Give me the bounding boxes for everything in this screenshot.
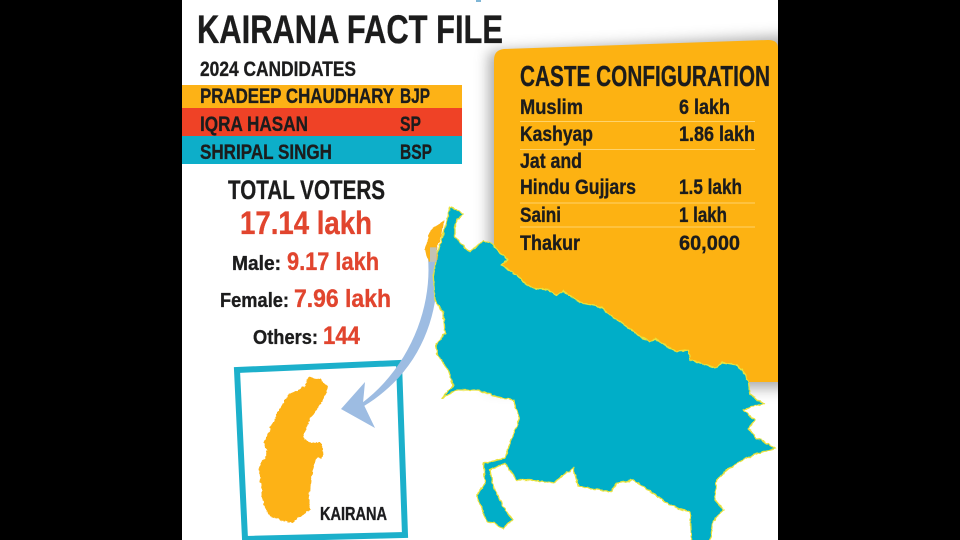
other voters: Others: bbox=[253, 327, 318, 349]
candidate: Iqra Hasan: IQRA HASAN bbox=[200, 113, 308, 136]
arrow: map to inset bbox=[341, 258, 437, 428]
voters heading: TOTAL VOTERS bbox=[228, 175, 385, 205]
caste table: Thakur bbox=[520, 232, 580, 255]
caste table: 6 lakh bbox=[679, 96, 730, 119]
female voters: 7.96 lakh bbox=[294, 285, 391, 313]
female voters bbox=[220, 285, 391, 313]
other voters: 144 bbox=[323, 322, 360, 350]
panel: caste configuration bbox=[489, 36, 790, 388]
caste table: Jat and bbox=[520, 150, 582, 173]
caste table bbox=[520, 96, 755, 255]
white page background bbox=[182, 0, 778, 540]
caste table: 60,000 bbox=[679, 232, 740, 255]
inset label: KAIRANA bbox=[320, 504, 387, 524]
candidate: Iqra Hasan: SP bbox=[400, 113, 421, 136]
caste table: Hindu Gujjars bbox=[520, 176, 636, 199]
candidate: Shripal Singh: SHRIPAL SINGH bbox=[200, 141, 332, 164]
Kairana map shape bbox=[259, 377, 328, 523]
male voters bbox=[232, 248, 379, 276]
caste table: Kashyap bbox=[520, 123, 593, 146]
candidate: Pradeep Chaudhary: PRADEEP CHAUDHARY bbox=[200, 85, 394, 108]
inset frame bbox=[237, 363, 405, 539]
panel: 2024 candidates bbox=[182, 58, 462, 164]
candidate: Pradeep Chaudhary: BJP bbox=[400, 85, 430, 108]
inset: Kairana constituency bbox=[237, 363, 405, 539]
total voters block bbox=[220, 175, 391, 350]
candidates heading: 2024 CANDIDATES bbox=[200, 58, 356, 81]
map highlight: Kairana bbox=[425, 221, 444, 262]
candidate: Iqra Hasan bbox=[200, 113, 421, 136]
heading: caste configuration: CASTE CONFIGURATION bbox=[520, 61, 770, 93]
caste table: 1.5 lakh bbox=[679, 176, 742, 199]
title: KAIRANA FACT FILE bbox=[197, 8, 503, 52]
other voters bbox=[253, 322, 360, 350]
female voters: Female: bbox=[220, 290, 289, 312]
caste table: 1 lakh bbox=[679, 204, 727, 227]
candidate: Shripal Singh: BSP bbox=[400, 141, 432, 164]
caste table: Muslim bbox=[520, 96, 583, 119]
voters total: 17.14 lakh bbox=[240, 205, 372, 241]
male voters: Male: bbox=[232, 253, 281, 275]
map: Uttar Pradesh bbox=[425, 207, 775, 540]
male voters: 9.17 lakh bbox=[287, 248, 379, 276]
caste table: Saini bbox=[520, 204, 561, 227]
caste table: 1.86 lakh bbox=[679, 123, 755, 146]
